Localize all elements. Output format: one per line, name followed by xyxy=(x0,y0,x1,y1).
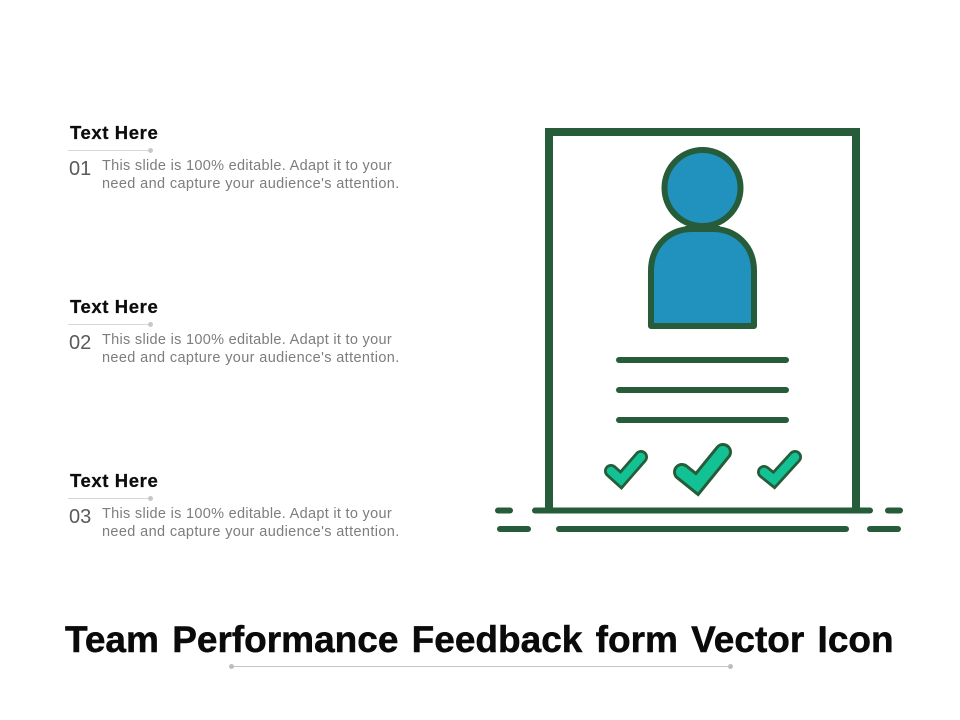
heading 01: Text Here xyxy=(70,122,158,143)
description 02: need and capture your audience's attention. xyxy=(102,350,400,366)
description 03: This slide is 100% editable. Adapt it to your xyxy=(102,506,392,522)
description 01: need and capture your audience's attention. xyxy=(102,176,400,192)
description 01 xyxy=(102,158,400,192)
description 03 xyxy=(102,506,400,540)
icon: check right xyxy=(764,457,795,480)
number 03: 03 xyxy=(69,506,91,528)
title underline xyxy=(229,664,733,669)
form frame xyxy=(549,132,856,510)
ground lines xyxy=(498,510,900,529)
text block 03 xyxy=(68,470,400,540)
number 02: 02 xyxy=(69,332,91,354)
icon: person xyxy=(651,150,754,326)
description 03: need and capture your audience's attention. xyxy=(102,524,400,540)
description 01: This slide is 100% editable. Adapt it to your xyxy=(102,158,392,174)
icon: check left xyxy=(611,457,641,480)
heading 02: Text Here xyxy=(70,296,158,317)
text block 02 xyxy=(68,296,400,366)
icon: feedback form xyxy=(495,128,903,532)
heading 03: Text Here xyxy=(70,470,158,491)
description 02: This slide is 100% editable. Adapt it to your xyxy=(102,332,392,348)
number 01: 01 xyxy=(69,158,91,180)
description 02 xyxy=(102,332,400,366)
title: Team Performance Feedback form Vector Icon xyxy=(65,619,894,660)
icon: check middle xyxy=(682,452,723,484)
text block 01 xyxy=(68,122,400,192)
form text lines xyxy=(619,360,786,420)
